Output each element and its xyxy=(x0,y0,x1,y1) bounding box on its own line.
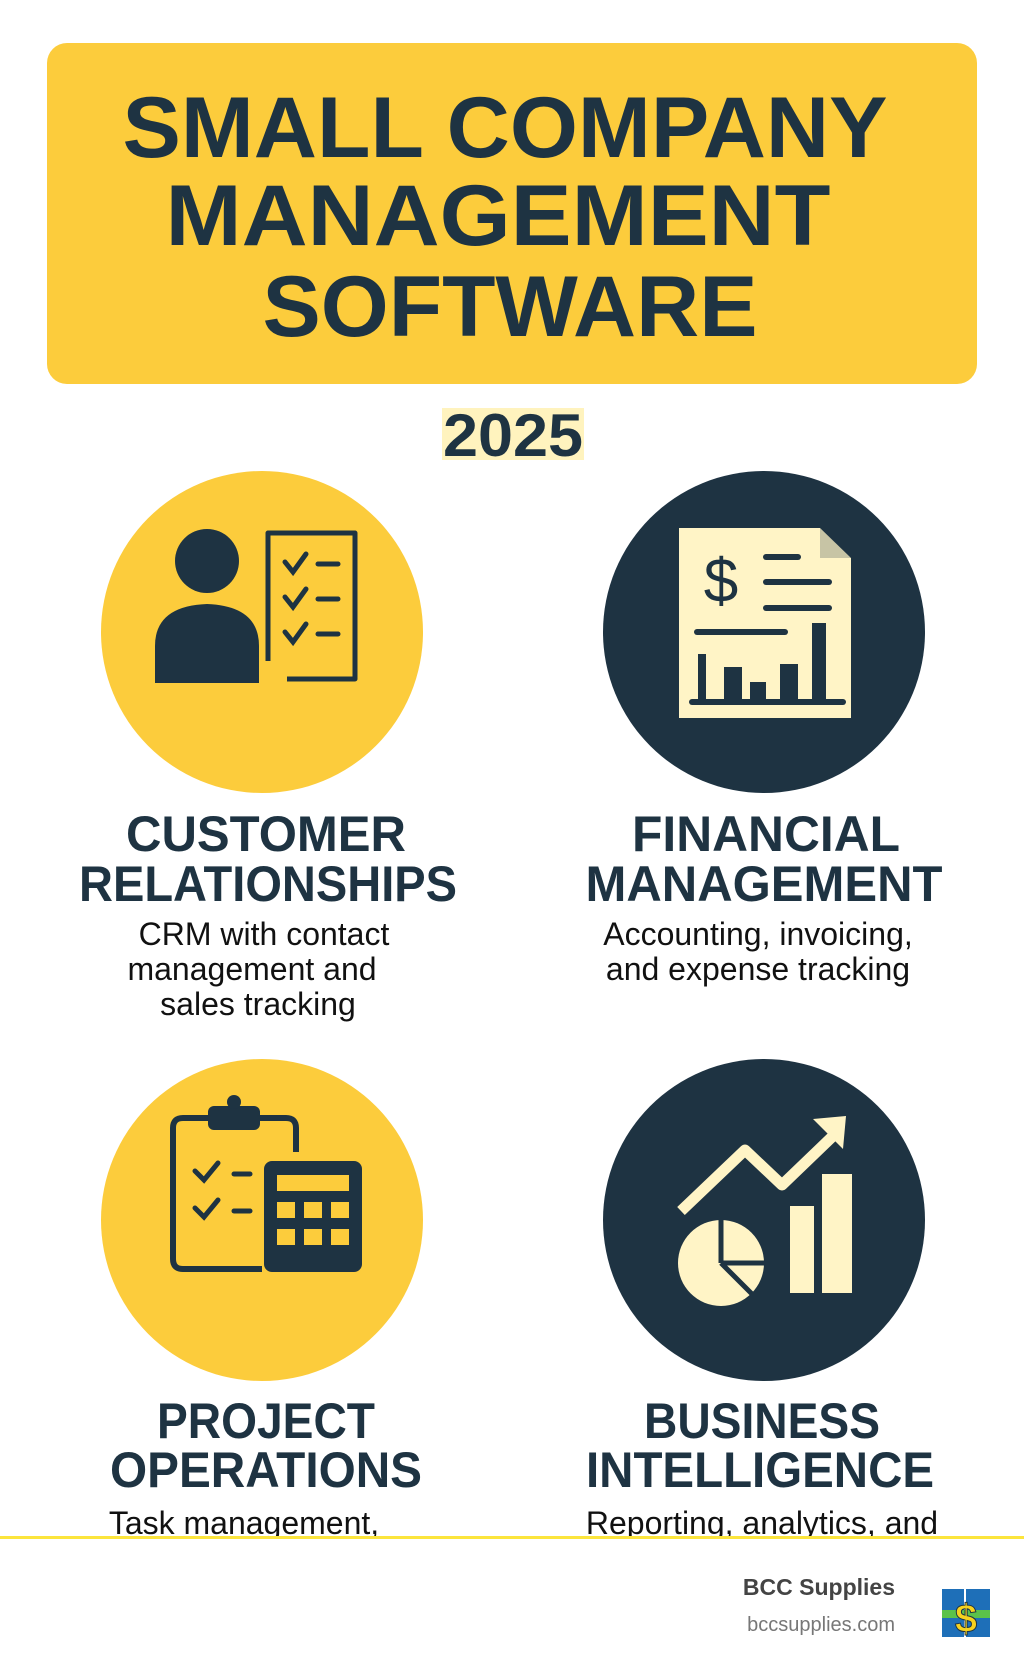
description: financial: Accounting, invoicing, xyxy=(603,916,913,952)
heading line 2: RELATIONSHIPS xyxy=(79,856,457,912)
icon: logo: $ xyxy=(955,1597,977,1641)
panel: financial management xyxy=(586,471,942,987)
icon: analytics chart xyxy=(603,1059,925,1381)
heading line 2: OPERATIONS xyxy=(110,1442,422,1498)
footer xyxy=(0,1536,1024,1666)
footer brand name: BCC Supplies xyxy=(743,1574,895,1600)
title banner: SOFTWARE xyxy=(262,259,758,355)
heading: financial management: FINANCIAL xyxy=(632,806,900,862)
panel: business intelligence xyxy=(586,1059,938,1541)
description: customer: management and xyxy=(127,951,377,987)
icon: project clipboard and grid xyxy=(101,1059,423,1381)
icon: financial document xyxy=(603,471,925,793)
title banner: SMALL COMPANY xyxy=(122,80,888,176)
description: business intelligence: Reporting, analytics, and xyxy=(586,1505,938,1541)
description: customer: CRM with contact xyxy=(139,916,389,952)
title banner: MANAGEMENT xyxy=(166,168,830,264)
heading line 2: MANAGEMENT xyxy=(586,856,942,912)
year label: 2025 xyxy=(443,402,583,469)
panel: customer relationships xyxy=(79,471,457,1022)
description: project: Task management, xyxy=(109,1505,379,1541)
footer url: bccsupplies.com xyxy=(747,1614,895,1636)
heading: project operations: PROJECT xyxy=(157,1393,375,1449)
icon: logo xyxy=(942,1589,990,1641)
heading: business intelligence: BUSINESS xyxy=(644,1393,880,1449)
icon: customer CRM xyxy=(101,471,423,793)
description: financial: and expense tracking xyxy=(606,951,910,987)
heading: customer relationships: CUSTOMER xyxy=(126,806,406,862)
icon: financial document: $ xyxy=(704,547,738,616)
description: customer: sales tracking xyxy=(160,986,356,1022)
panel: project operations xyxy=(101,1059,423,1541)
heading line 2: INTELLIGENCE xyxy=(586,1442,934,1498)
title banner xyxy=(47,43,977,384)
